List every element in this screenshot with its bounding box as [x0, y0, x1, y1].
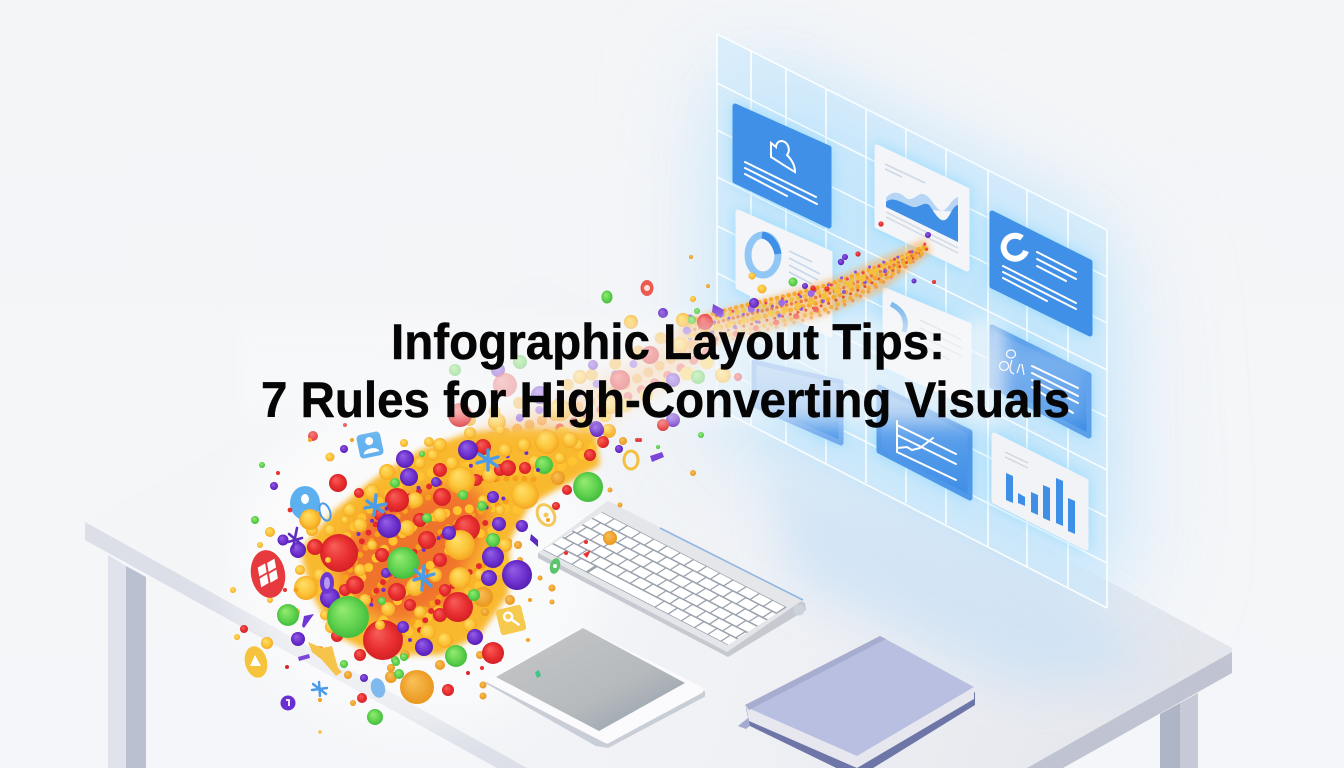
spine [745, 636, 886, 710]
balls purple [270, 423, 604, 682]
card text lines [745, 162, 817, 204]
table leg right [1160, 693, 1198, 768]
card: donut text [992, 213, 1090, 334]
icon: purple ribbon [302, 614, 314, 628]
mid balls mixed [292, 438, 595, 670]
title line 1: Infographic Layout Tips: [391, 314, 945, 370]
balls green [251, 451, 603, 725]
card: profile [735, 106, 829, 226]
table leg left [108, 555, 146, 768]
card: people [992, 327, 1089, 436]
notebook ribbon [738, 718, 755, 729]
icon: green tag [548, 557, 562, 575]
tablet [487, 628, 704, 747]
wash behind title right [985, 350, 1085, 420]
icon: yellow bubble [241, 644, 271, 680]
card: report [885, 290, 969, 405]
icon: yellow search tile [495, 604, 527, 636]
cluster base red [340, 485, 490, 625]
icon: blue person tile [356, 431, 384, 459]
white glow behind particles [230, 390, 610, 730]
area chart front [886, 200, 958, 242]
tablet screen [496, 628, 685, 731]
wide blue haze [720, 60, 1130, 600]
wash behind title left [235, 312, 1005, 434]
card: area chart [877, 147, 967, 269]
table front edge right [1027, 652, 1232, 768]
icon: yellow blob [308, 642, 342, 676]
pages [746, 688, 974, 768]
reflection on desk [770, 470, 1150, 690]
stream haze lower [480, 340, 700, 450]
title [261, 314, 1070, 428]
card: bar chart [994, 435, 1086, 548]
line chart [897, 421, 956, 480]
particle explosion [230, 423, 696, 725]
icon: blue user bubble [290, 486, 320, 529]
keys [543, 512, 787, 645]
keyboard [538, 501, 806, 657]
icon: stars and shards [288, 450, 538, 696]
hinge [794, 604, 804, 616]
table front edge left [85, 522, 527, 768]
notebook [738, 636, 975, 768]
icon: blue oval [369, 677, 387, 699]
icon: yellow ring [624, 451, 638, 469]
table [85, 273, 1232, 768]
cover [746, 636, 974, 756]
stream haze upper [680, 238, 932, 352]
card: line chart [879, 387, 970, 498]
icon: blue ring [317, 502, 333, 522]
floating grid panel [717, 34, 1107, 608]
cluster base orange [300, 428, 600, 655]
icon: purple oval [320, 572, 334, 594]
icon: red ring coin [640, 280, 654, 296]
stray specks [276, 423, 591, 734]
icon: yellow coin [534, 501, 558, 529]
table top surface [85, 273, 1232, 768]
bars [1006, 473, 1075, 534]
icon: red windows badge [247, 547, 289, 601]
icon: purple coin [280, 696, 296, 710]
card: donut chart [738, 212, 830, 335]
balls yellow [230, 424, 696, 706]
particle stream [448, 221, 936, 469]
area chart back [886, 193, 958, 212]
back cover [746, 692, 975, 768]
icon: ring [1004, 236, 1026, 259]
balls red [240, 431, 596, 703]
icon: person outline [771, 141, 795, 172]
icon: people [1000, 350, 1024, 375]
blue glow behind grid [740, 70, 1090, 590]
cluster dots [320, 440, 600, 650]
stream dots upper [690, 244, 927, 352]
card: washed blue left [754, 362, 841, 443]
title line 2: 7 Rules for High-Converting Visuals [261, 372, 1070, 428]
keyboard base [538, 501, 806, 657]
stream balls [448, 221, 936, 462]
donut ring [748, 235, 778, 275]
stream dots lower [470, 325, 720, 455]
